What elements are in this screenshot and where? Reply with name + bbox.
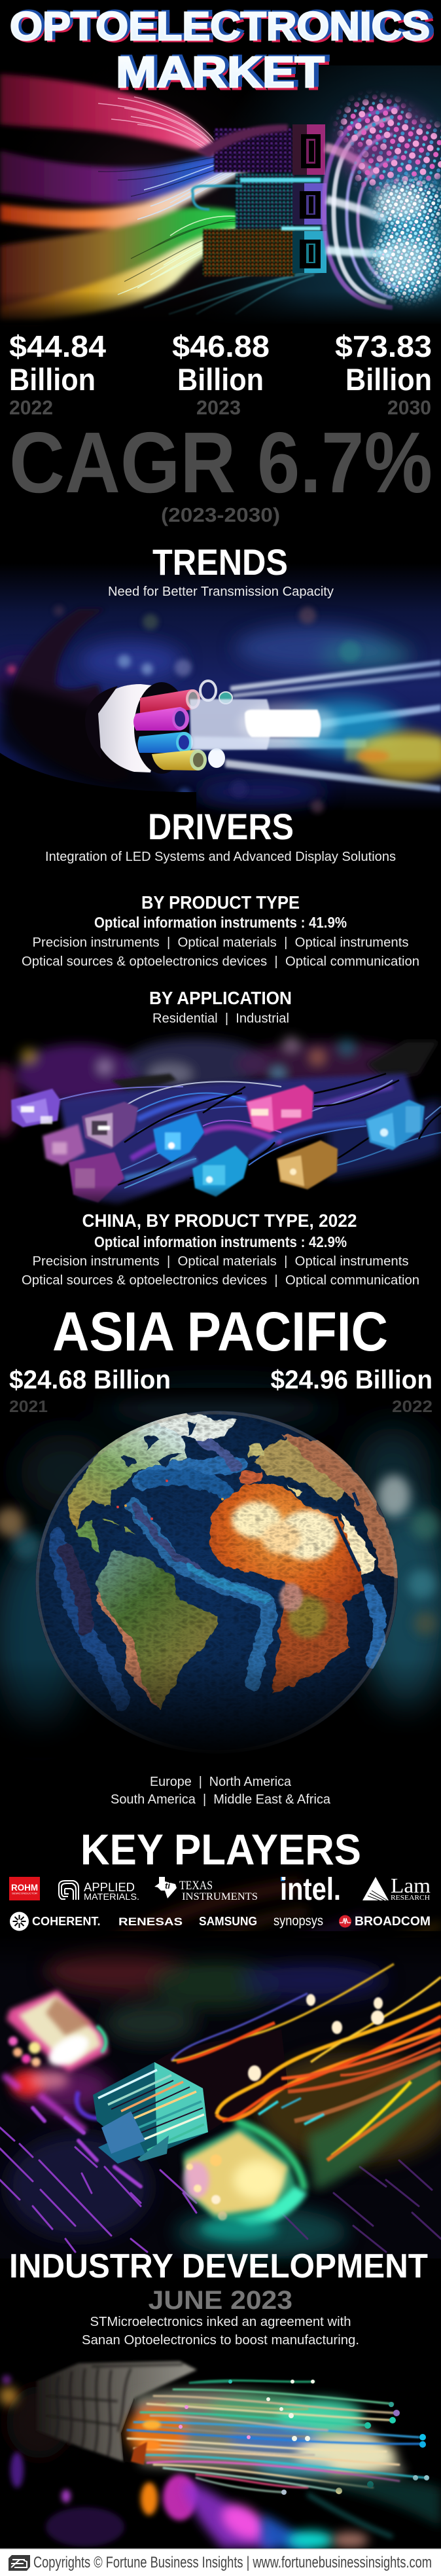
market size stat 2022: 2022 (9, 396, 53, 419)
market size stat 2022: $44.84 (9, 329, 106, 363)
logo: ROHM (9, 1877, 40, 1900)
logo: Texas Instruments: TEXAS (179, 1879, 213, 1893)
sharp centre connector (93, 2062, 208, 2164)
optical modules (292, 124, 326, 273)
regional value 2022 (271, 1366, 432, 1416)
trends heading: TRENDS (152, 541, 288, 583)
regional value 2022: $24.96 Billion (271, 1366, 432, 1394)
segment: by application: Residential | Industrial (152, 1011, 289, 1026)
logo: Applied Materials (59, 1881, 139, 1902)
title: OPTOELECTRONICS (12, 3, 434, 47)
other regions list: Europe | North America (150, 1775, 292, 1789)
logo: ROHM: ROHM (11, 1882, 38, 1893)
title: MARKET (118, 46, 329, 96)
market size stat 2030: $73.83 (335, 329, 432, 363)
CAGR period: (2023-2030) (161, 503, 280, 526)
drivers text: Integration of LED Systems and Advanced Display Solutions (45, 850, 396, 864)
light particles (327, 90, 441, 309)
cable sheath (0, 609, 196, 812)
segment: by product type (22, 892, 419, 969)
development text: STMicroelectronics inked an agreement with (90, 2315, 351, 2329)
market size stat 2023: 2023 (196, 396, 241, 419)
segment: by product type: Optical information instruments : 41.9% (94, 914, 347, 931)
logo: Samsung: SAMSUNG (199, 1915, 257, 1928)
glowing fibre tips (248, 1994, 384, 2081)
china segment: Optical sources & optoelectronics devices | Optical communication (22, 1273, 419, 1288)
dark connector housing (154, 2029, 288, 2132)
surface reflections (10, 2452, 441, 2549)
icon: Fortune Business Insights logo (9, 2555, 30, 2571)
bundle hot spots (131, 2420, 161, 2465)
development text (82, 2315, 359, 2348)
china segment: CHINA, BY PRODUCT TYPE, 2022 (82, 1210, 357, 1231)
light rings (324, 108, 399, 308)
logo: Applied Materials: APPLIED (84, 1881, 135, 1894)
connector: purple (11, 1089, 60, 1127)
light rays (190, 660, 441, 792)
connector: magenta dim (69, 1152, 124, 1203)
logo: Lam Research: RESEARCH (391, 1894, 430, 1902)
drivers heading: DRIVERS (148, 806, 294, 847)
segment: by product type: Optical sources & optoelectronics devices | Optical communication (22, 954, 419, 969)
illustration: textured globe (0, 1388, 441, 1761)
connector: clear (82, 1102, 138, 1149)
segment: by product type: BY PRODUCT TYPE (141, 892, 300, 913)
cable jacket (37, 2361, 197, 2461)
fibre mass glow (128, 2389, 406, 2480)
market size stat 2023: $46.88 (172, 329, 270, 363)
connector: blue lower (192, 1146, 249, 1197)
desert glow (116, 1479, 360, 1638)
regional value 2022: 2022 (392, 1398, 432, 1416)
market size stat 2030: Billion (345, 362, 432, 397)
continents (69, 1411, 400, 1712)
blurred top connector (3, 1990, 108, 2131)
wire bundles (59, 1041, 441, 1205)
connector: sky (366, 1100, 425, 1150)
footer (0, 2549, 441, 2576)
illustration: colourful LED connectors (0, 1036, 441, 1218)
logo: Synopsys: synopsys (273, 1914, 323, 1929)
circuit board (192, 124, 321, 276)
logo: ROHM: SEMICONDUCTOR (12, 1892, 38, 1895)
faint wires behind logos (79, 1885, 441, 1964)
title: OPTOELECTRONICS (12, 5, 434, 50)
logo: Texas Instruments: INSTRUMENTS (182, 1891, 258, 1902)
logo: Lam Research: Lam (391, 1874, 431, 1897)
logo: Texas Instruments (154, 1877, 258, 1902)
title: OPTOELECTRONICS (10, 4, 430, 48)
illustration: ethernet connectors with glowing wires (0, 1931, 441, 2259)
ocean currents (56, 1434, 380, 1702)
illustration: glowing optical fibres entering modules (0, 65, 441, 325)
segment: by product type: Precision instruments | Optical materials | Optical instruments (33, 935, 408, 950)
china segment (22, 1210, 419, 1288)
other regions list (111, 1775, 331, 1807)
illustration: fibre optic cable (0, 563, 441, 813)
segment: by application (149, 988, 292, 1026)
china segment: Optical information instruments : 42.9% (94, 1233, 347, 1250)
segment: by application: BY APPLICATION (149, 988, 292, 1008)
industry development heading: INDUSTRY DEVELOPMENT (9, 2247, 428, 2285)
glowing wires (171, 1964, 441, 2160)
regional value 2021: 2021 (9, 1398, 48, 1416)
key players heading: KEY PLAYERS (80, 1825, 361, 1874)
logo: Intel: intel. (280, 1872, 341, 1907)
illustration: fibre optic bundle (0, 2361, 441, 2549)
market size stat 2022: Billion (9, 362, 96, 397)
connector: tan (277, 1140, 338, 1189)
regional value 2021 (9, 1366, 171, 1416)
lower connector (183, 2049, 441, 2241)
coloured tubes (133, 681, 232, 771)
logo: Broadcom: BROADCOM (355, 1915, 431, 1929)
connector: lilac dim (43, 1124, 85, 1165)
market size stat 2022 (9, 329, 106, 419)
individual fibres (128, 2380, 425, 2492)
title: MARKET (118, 50, 328, 99)
fibre tips (179, 2380, 429, 2495)
regional heading: ASIA PACIFIC (52, 1301, 388, 1362)
logo: Texas Instruments: ti (165, 1881, 170, 1891)
logo: Renesas: RENESAS (118, 1915, 183, 1928)
connector: blue (153, 1113, 204, 1162)
logo: Applied Materials: MATERIALS. (84, 1891, 139, 1902)
circuit traces (0, 2108, 441, 2252)
other regions list: South America | Middle East & Africa (111, 1792, 331, 1807)
market size stat 2030: 2030 (387, 396, 431, 419)
development date: JUNE 2023 (148, 2286, 292, 2315)
market size stat 2023 (172, 329, 270, 419)
logo: Lam Research (362, 1874, 431, 1902)
market size stat 2023: Billion (177, 362, 264, 397)
logo: Coherent: COHERENT. (32, 1915, 101, 1928)
connector: pink (246, 1085, 313, 1133)
market size stat 2030 (335, 329, 432, 419)
regional value 2021: $24.68 Billion (9, 1366, 171, 1394)
trends text: Need for Better Transmission Capacity (108, 585, 334, 599)
title: MARKET (116, 48, 325, 97)
title (10, 3, 434, 99)
logo: Coherent (10, 1912, 101, 1931)
china segment: Precision instruments | Optical materials | Optical instruments (33, 1254, 408, 1269)
development text: Sanan Optoelectronics to boost manufacturing. (82, 2333, 359, 2348)
